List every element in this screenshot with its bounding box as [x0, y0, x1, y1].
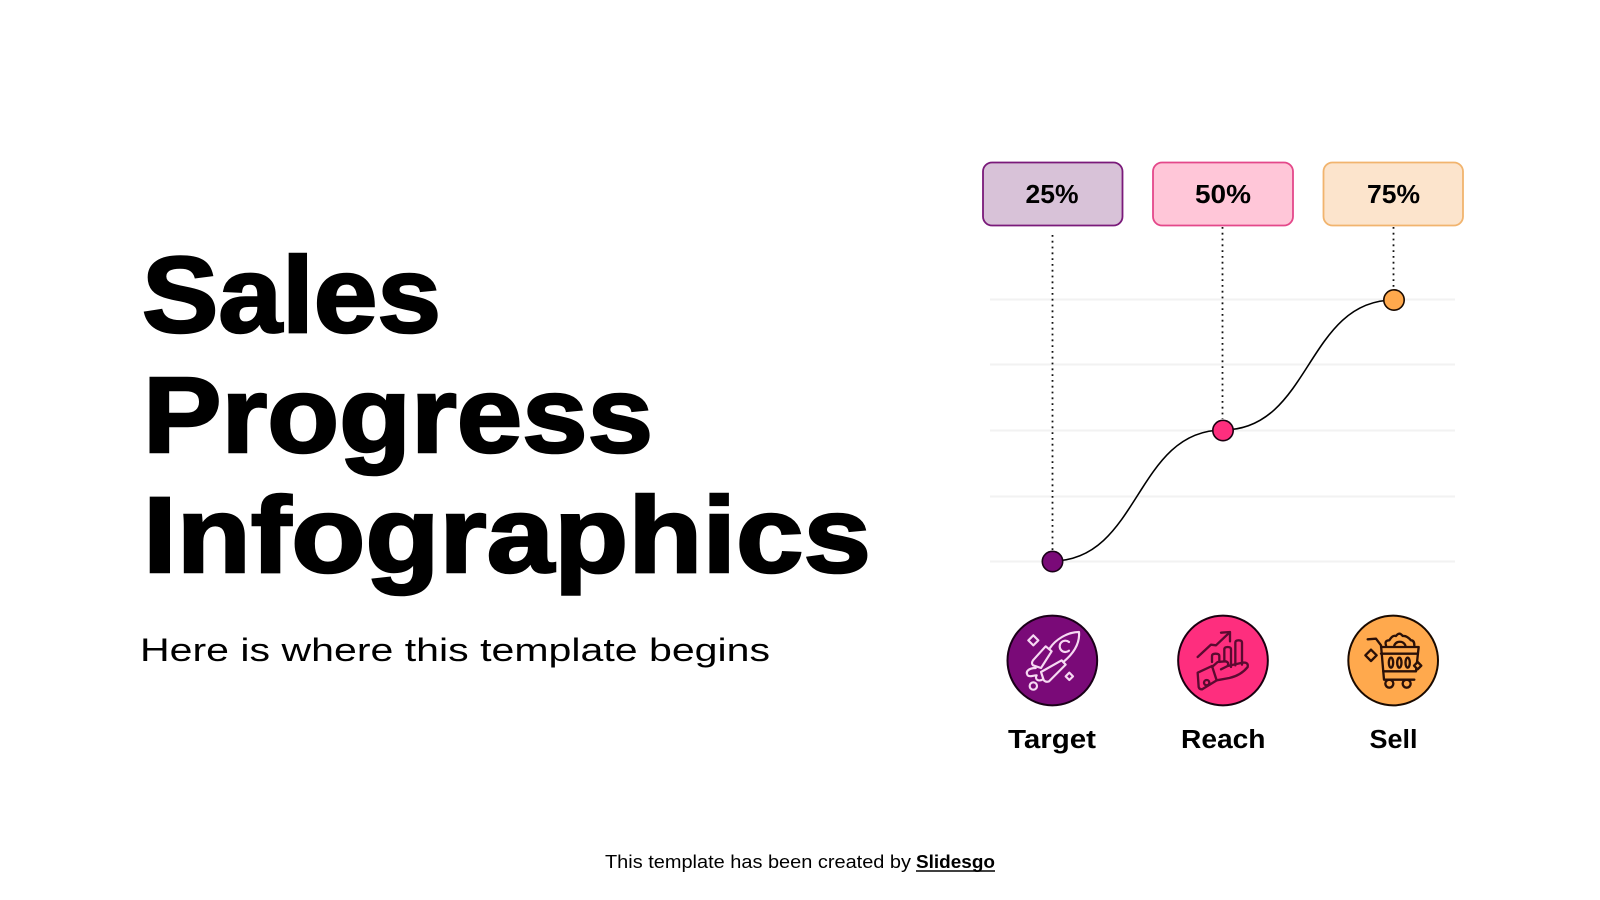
callout: 75% [1324, 162, 1463, 226]
footer credit: Slidesgo [916, 851, 995, 872]
title: Sales [142, 234, 441, 355]
footer credit: This template has been created by [605, 851, 912, 872]
callout: 25%: 25% [1026, 179, 1078, 209]
icon: shopping cart [1348, 616, 1438, 705]
progress curve [1052, 300, 1394, 561]
label: Sell: Sell [1370, 726, 1418, 754]
callout: 50%: 50% [1195, 179, 1251, 209]
label: Reach: Reach [1181, 726, 1266, 754]
dotted leader lines [1052, 227, 1394, 550]
marker: 50% [1213, 420, 1233, 441]
marker: 25% [1042, 551, 1063, 572]
icon: rocket [1008, 616, 1097, 705]
marker: 75% [1384, 290, 1404, 310]
callout: 75%: 75% [1367, 179, 1420, 209]
title: Infographics [143, 474, 871, 595]
icon: hand with growth chart [1178, 616, 1268, 705]
line chart [990, 227, 1455, 572]
title: Progress [143, 354, 653, 475]
title [142, 234, 871, 595]
subtitle: Here is where this template begins [140, 632, 770, 668]
label: Target: Target [1008, 726, 1097, 754]
callout: 50% [1153, 162, 1293, 226]
callout: 25% [983, 162, 1122, 226]
